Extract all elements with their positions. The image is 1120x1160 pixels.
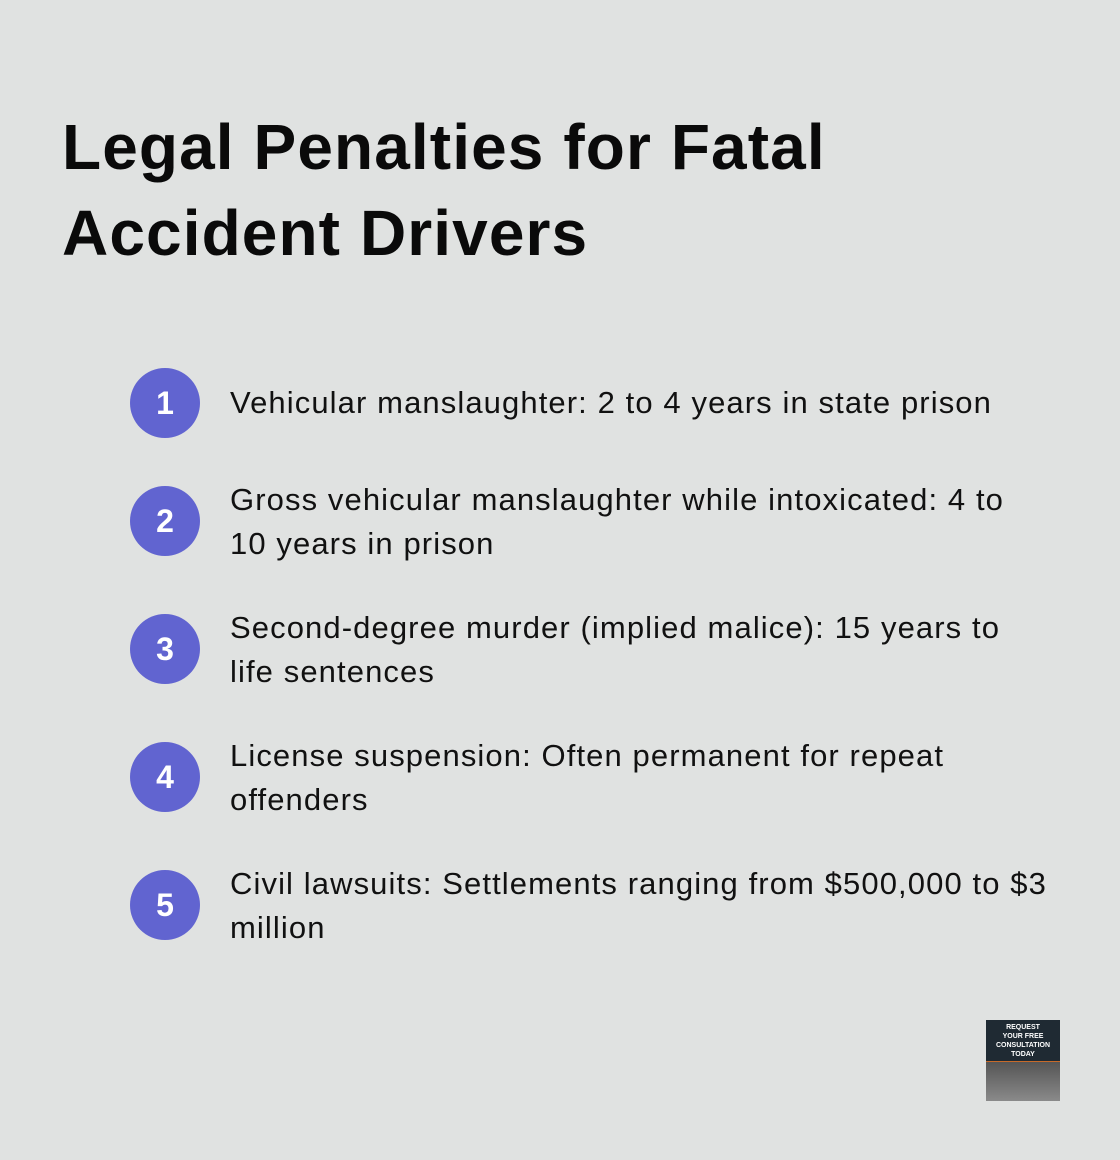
badge 2: 2 [156,503,174,539]
badge 5 [130,870,200,940]
text 4: offenders [230,782,369,817]
title: Accident Drivers [62,197,588,269]
badge 4: 4 [156,759,174,795]
text 3: Second-degree murder (implied malice): 15 years to [230,610,1000,645]
text 5: Civil lawsuits: Settlements ranging from $500,000 to $3 [230,866,1047,901]
text 1: Vehicular manslaughter: 2 to 4 years in state prison [230,385,992,420]
badge text: YOUR FREE [1003,1033,1043,1040]
text 2 [230,482,1004,561]
title [62,111,826,269]
badge text: REQUEST [1006,1024,1040,1031]
badge text: CONSULTATION [996,1042,1050,1049]
item 2 [130,482,1004,561]
text 5 [230,866,1047,945]
badge 3 [130,614,200,684]
consultation badge [986,1020,1060,1100]
text 2: 10 years in prison [230,526,494,561]
item 1 [130,368,992,438]
text 3 [230,610,1000,689]
text 4: License suspension: Often permanent for repeat [230,738,944,773]
badge 2 [130,486,200,556]
badge text [996,1024,1050,1058]
title: Legal Penalties for Fatal [62,111,826,183]
text 5: million [230,910,326,945]
badge 1: 1 [156,385,174,421]
text 2: Gross vehicular manslaughter while intoxicated: 4 to [230,482,1004,517]
badge photo [986,1061,1060,1101]
badge 3: 3 [156,631,174,667]
item 4 [130,738,944,817]
item 5 [130,866,1047,945]
badge 5: 5 [156,887,174,923]
item 3 [130,610,1000,689]
badge 4 [130,742,200,812]
badge 1 [130,368,200,438]
badge text: TODAY [1011,1051,1035,1058]
text 4 [230,738,944,817]
text 3: life sentences [230,654,435,689]
